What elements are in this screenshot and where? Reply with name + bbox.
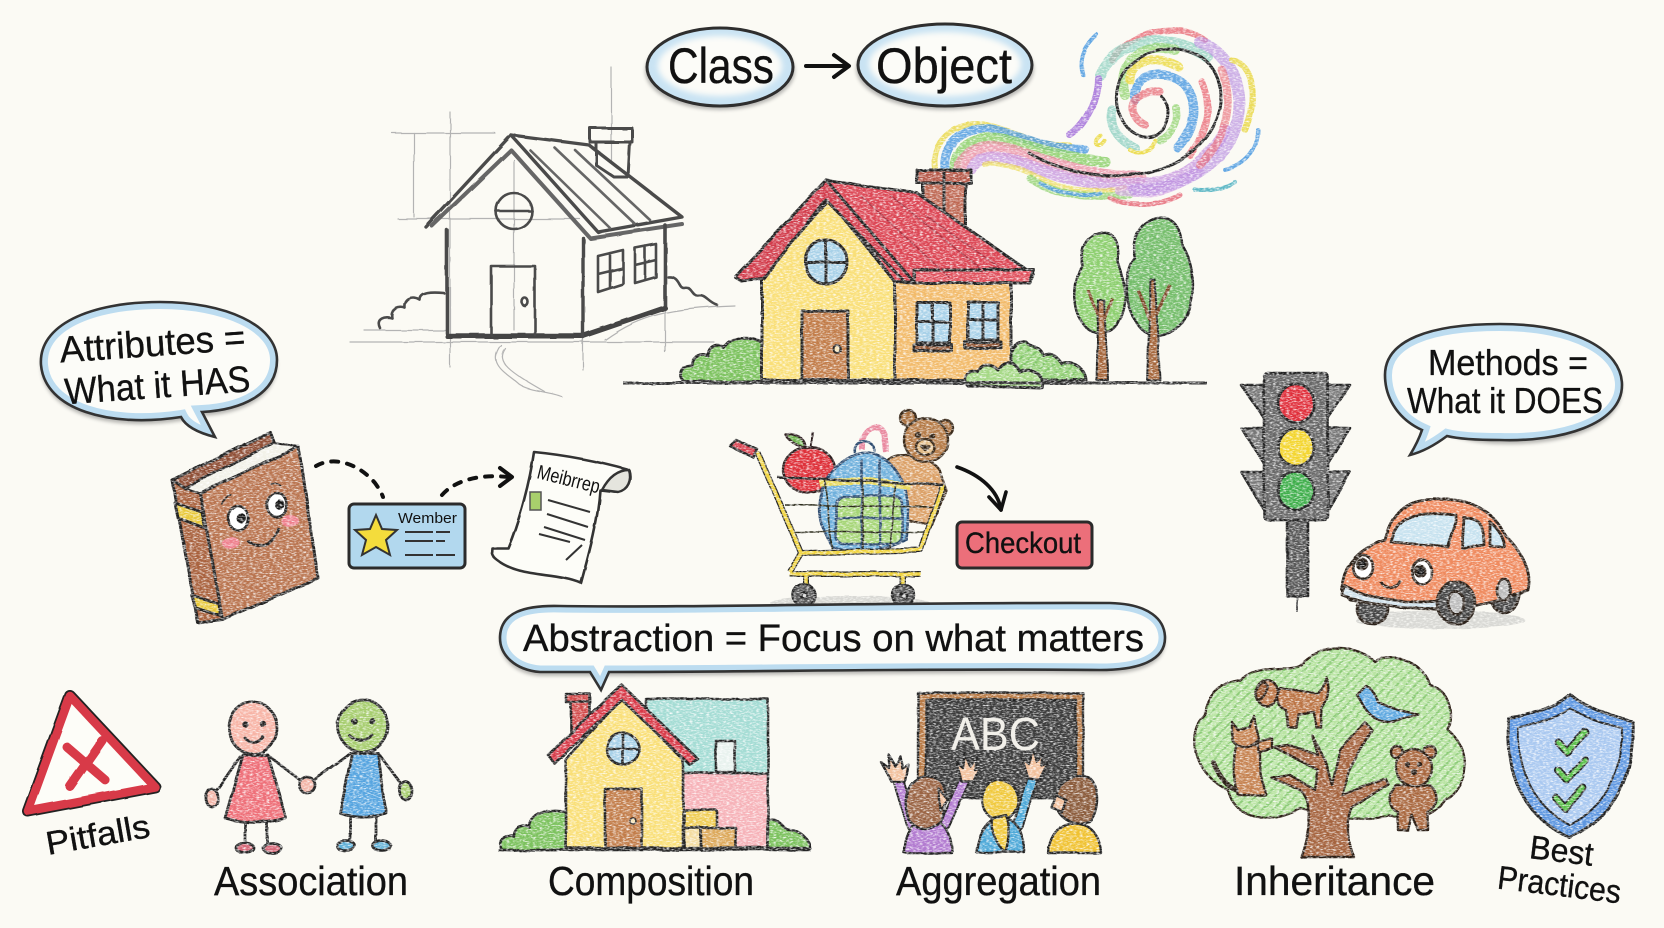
cart frame (777, 477, 943, 550)
joined hands (299, 777, 315, 793)
colored house (object) (623, 170, 1207, 388)
label: Best Practices: Practices (1496, 859, 1623, 910)
blackboard (918, 693, 1083, 798)
bear (886, 410, 953, 525)
arrow: book to card (316, 461, 383, 497)
pink figure (206, 702, 286, 853)
rainbow swirl (935, 30, 1258, 204)
check marks (1556, 732, 1585, 808)
trunk (1272, 722, 1388, 857)
speech bubble: Abstraction (500, 603, 1165, 690)
round window (805, 240, 847, 284)
front wall (762, 200, 895, 380)
yellow light (1278, 428, 1314, 466)
label: Aggregation: Aggregation (896, 858, 1101, 904)
composition chimney (571, 696, 590, 734)
sketch bushes (379, 277, 717, 328)
roof (735, 180, 1034, 283)
sketch roof (426, 135, 682, 232)
button: Checkout (957, 522, 1092, 568)
green light (1278, 472, 1314, 510)
arrow: class to object (806, 55, 849, 77)
red light (1278, 384, 1314, 422)
blue child (976, 780, 1024, 852)
icon: pitfalls warning triangle (28, 696, 155, 811)
bird (1357, 686, 1418, 722)
composition window (607, 733, 639, 765)
composition door (605, 789, 642, 848)
attributes text: What it HAS (63, 358, 252, 412)
sketch round window (496, 193, 532, 229)
icon: composition house (498, 685, 810, 850)
cart handle (730, 440, 758, 458)
composition front (566, 698, 683, 848)
bubble: Class (645, 28, 795, 110)
sketch windows (598, 244, 656, 292)
windows (914, 302, 1001, 351)
rooms (646, 699, 768, 848)
blackboard letters: ABC (951, 708, 1040, 760)
bushes (681, 338, 1043, 388)
icon: member card: Wember (398, 510, 457, 527)
sketch door (491, 266, 535, 335)
foliage (1195, 648, 1465, 819)
icon: inheritance tree with animals (1195, 648, 1465, 857)
car face (1353, 555, 1432, 588)
pink strap (862, 427, 886, 452)
door (802, 311, 848, 380)
icon: membership scroll (492, 452, 630, 583)
composition roof (548, 685, 699, 765)
bubble: Class: Class (668, 38, 774, 94)
back bush (1009, 342, 1086, 380)
side wall (895, 280, 1011, 380)
apple (783, 432, 835, 493)
hands (881, 748, 1048, 782)
icon: association stick figures (206, 700, 412, 853)
label: Best Practices: Best (1528, 828, 1596, 873)
attributes text: Attributes = (58, 317, 247, 371)
car bumper (1342, 586, 1447, 608)
icon: aggregation blackboard and children (881, 693, 1101, 853)
speech bubble: Methods (1385, 324, 1622, 455)
chimney (917, 170, 971, 228)
methods text: What it DOES (1407, 380, 1603, 421)
backpack (820, 442, 910, 551)
sketch house (class blueprint) (350, 67, 735, 397)
title: Class to Object (645, 24, 1034, 110)
sketch chimney (590, 128, 632, 177)
yellow child (1048, 776, 1101, 853)
label: Association: Association (214, 858, 408, 904)
label: Composition: Composition (548, 858, 754, 904)
icon: traffic light (1241, 373, 1350, 612)
bear (1390, 746, 1437, 830)
icon: best practices shield (1508, 694, 1633, 838)
methods text (1407, 342, 1603, 421)
arrow: cart to checkout (957, 467, 1006, 510)
book face (222, 483, 299, 549)
abstraction text: Abstraction = Focus on what matters (523, 618, 1144, 660)
construction lines (350, 67, 735, 397)
icon: smiling car (1342, 500, 1529, 629)
cat (1213, 716, 1272, 795)
limbs (212, 753, 406, 845)
car windows (1391, 514, 1504, 548)
green figure (337, 700, 412, 851)
icon: smiling book (172, 432, 318, 623)
label: Inheritance: Inheritance (1234, 858, 1435, 904)
bubble: Object: Object (876, 38, 1012, 94)
boxes (684, 810, 736, 848)
wheels (793, 584, 914, 606)
dog (1256, 677, 1328, 727)
sketch walls (447, 225, 665, 335)
speech bubble: Attributes (41, 302, 277, 437)
bubble: Object (856, 24, 1034, 110)
label: Best Practices (1496, 825, 1627, 910)
label: Pitfalls: Pitfalls (43, 807, 153, 862)
methods text: Methods = (1428, 342, 1588, 383)
trees (1075, 217, 1193, 380)
purple child (904, 777, 952, 853)
attributes text (58, 317, 252, 412)
icon: member card (349, 504, 465, 568)
raised arms (898, 772, 1034, 825)
ground line (623, 382, 1207, 384)
arrow: card to scroll (442, 468, 512, 495)
button: Checkout: Checkout (965, 527, 1082, 560)
icon: shopping cart (730, 410, 953, 610)
composition bushes (500, 811, 810, 850)
icon: membership scroll: Meibrrep (535, 462, 602, 498)
